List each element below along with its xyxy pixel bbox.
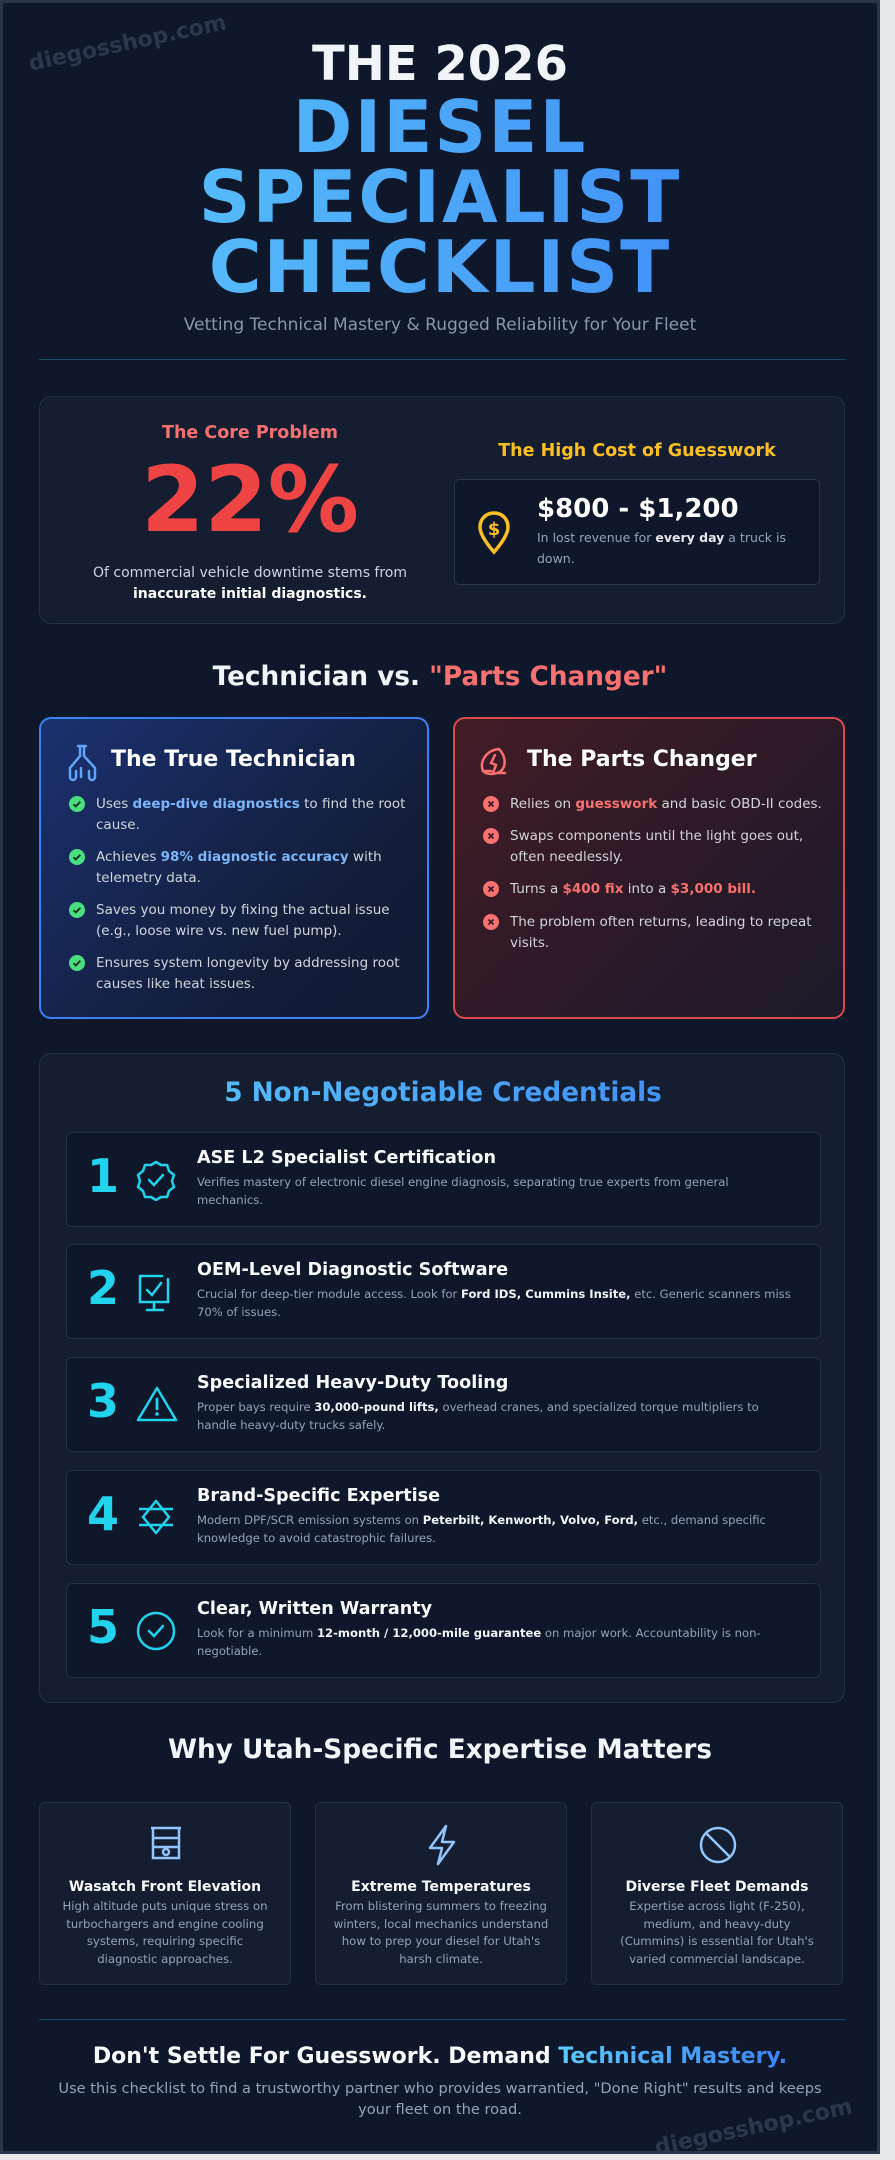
card: elevation: systems, requiring specific [87,1934,243,1948]
heading: utah: Why Utah-Specific Expertise Matters [168,1735,712,1765]
core problem: The Core Problem [162,423,338,443]
core problem: inaccurate initial diagnostics. [133,586,367,602]
credential 1: 1 [87,1149,119,1203]
panel: parts changer: The Parts Changer [527,747,757,772]
title: CHECKLIST [209,225,671,309]
credential 5: negotiable. [197,1644,262,1658]
watermark top: diegosshop.com [27,10,229,77]
cost box: $800 - $1,200 [537,494,739,524]
card: elevation: turbochargers and engine cooling [66,1916,264,1930]
panel: true technician: Ensures system longevity by addressing root causes like heat issues. [96,955,400,992]
core problem: Of commercial vehicle downtime stems from [93,565,407,581]
icon: money pin: $ [488,519,500,540]
title [199,36,681,309]
title: DIESEL [293,85,587,169]
high cost: The High Cost of Guesswork [498,441,776,461]
credential 4: Brand-Specific Expertise [197,1486,440,1506]
cost box: In lost revenue for every day a truck is down. [537,530,786,566]
panel: true technician: Achieves 98% diagnostic accuracy with telemetry data. [96,849,382,886]
subtitle: Vetting Technical Mastery & Rugged Reliability for Your Fleet [184,315,696,335]
panel: credentials [39,1053,845,1703]
credential 2: 2 [87,1261,119,1315]
credential 3: handle heavy-duty trucks safely. [197,1418,385,1432]
core problem [93,423,407,602]
cta text: Use this checklist to find a trustworthy partner who provides warrantied, "Done Right" results and keeps your fleet on the road. [58,2080,822,2118]
credential 4: 4 [87,1487,119,1541]
panel: parts changer [453,717,845,1019]
credential 2: 70% of issues. [197,1305,281,1319]
panel: parts changer: Swaps components until the light goes out, often needlessly. [510,828,803,865]
credential 5: Clear, Written Warranty [197,1599,432,1619]
panel: true technician [39,717,429,1019]
cost box [454,479,820,585]
icon: money pin [478,511,510,554]
panel: stats [39,396,845,624]
title: SPECIALIST [199,155,681,239]
credential 5 [66,1583,821,1678]
credential 3: Proper bays require 30,000-pound lifts, overhead cranes, and specialized torque multipliers to [197,1400,759,1414]
credential 3: 3 [87,1374,119,1428]
card: temperatures [315,1802,567,1985]
icon: broken part [480,748,506,776]
credential 3 [66,1357,821,1452]
panel: true technician: Saves you money by fixing the actual issue (e.g., loose wire vs. new fuel pump). [96,902,390,939]
credential 2 [66,1244,821,1339]
credential 2: Crucial for deep-tier module access. Look for Ford IDS, Cummins Insite, etc. Generic scanners miss [197,1287,791,1301]
card: elevation: diagnostic approaches. [97,1952,233,1966]
credential 4: Modern DPF/SCR emission systems on Peterbilt, Kenworth, Volvo, Ford, etc., demand specific [197,1513,766,1527]
card: temperatures: winters, local mechanics understand [334,1916,548,1930]
heading: 5 Non-Negotiable Credentials [224,1078,662,1108]
card: elevation: Wasatch Front Elevation [69,1879,261,1895]
card: temperatures: Extreme Temperatures [351,1879,531,1895]
card: fleet: Diverse Fleet Demands [625,1879,809,1895]
credential 2: OEM-Level Diagnostic Software [197,1260,508,1280]
cta heading: Don't Settle For Guesswork. Demand Technical Mastery. [93,2044,787,2069]
panel: true technician: The True Technician [111,747,356,772]
credential 3: Specialized Heavy-Duty Tooling [197,1373,508,1393]
panel: parts changer: Relies on guesswork and basic OBD-II codes. [510,796,822,812]
credential 1 [66,1132,821,1227]
card: fleet: varied commercial landscape. [629,1952,805,1966]
title: THE 2026 [312,36,568,92]
card: elevation [39,1802,291,1985]
panel: parts changer: The problem often returns, leading to repeat visits. [510,914,812,951]
card: fleet: (Cummins) is essential for Utah's [620,1934,814,1948]
icon: flask [68,744,96,782]
credential 1: Verifies mastery of electronic diesel engine diagnosis, separating true experts from general [197,1175,729,1189]
credential 5: Look for a minimum 12-month / 12,000-mile guarantee on major work. Accountability is non- [197,1626,761,1640]
credential 5: 5 [87,1600,119,1654]
card: temperatures: how to prep your diesel for Utah's [342,1934,540,1948]
panel: true technician: Uses deep-dive diagnostics to find the root cause. [96,796,405,833]
card: temperatures: From blistering summers to freezing [335,1899,547,1913]
credential 4 [66,1470,821,1565]
card: elevation: High altitude puts unique stress on [62,1899,268,1913]
card: temperatures: harsh climate. [399,1952,483,1966]
card: fleet [591,1802,843,1985]
panel: parts changer: Turns a $400 fix into a $3,000 bill. [510,881,756,897]
credential 1: mechanics. [197,1193,263,1207]
card: fleet: medium, and heavy-duty [643,1916,791,1930]
credential 1: ASE L2 Specialist Certification [197,1148,496,1168]
credential 4: knowledge to avoid catastrophic failures. [197,1531,436,1545]
heading: technician vs parts changer: Technician vs. "Parts Changer" [213,662,667,692]
core problem: 22% [141,448,359,553]
heading [40,1078,846,1108]
card: fleet: Expertise across light (F-250), [629,1899,805,1913]
